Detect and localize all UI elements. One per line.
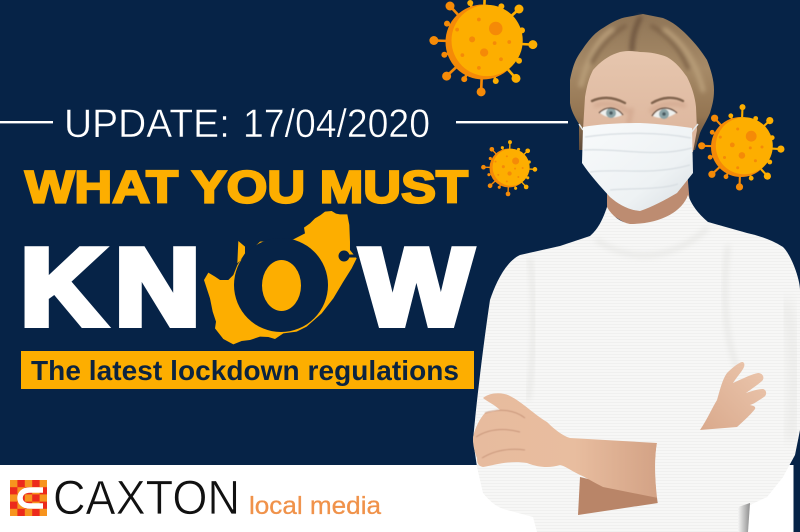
sweater knit texture <box>473 195 800 532</box>
hair strands <box>581 18 703 90</box>
right rule <box>456 121 568 123</box>
front forearm and hand <box>473 393 658 498</box>
body lower edge shadow <box>738 503 750 532</box>
photo: woman in mask <box>473 14 800 532</box>
back hand fingers <box>700 362 766 430</box>
update heading <box>0 102 568 146</box>
letter K: K <box>20 226 104 348</box>
neck <box>607 170 690 226</box>
face mask <box>582 123 693 211</box>
logo: Caxton <box>10 472 381 525</box>
face shading <box>594 104 686 124</box>
icon: large virus <box>429 0 537 96</box>
icon: right virus <box>698 104 784 190</box>
sweater shading <box>528 228 794 440</box>
lower forearm <box>578 477 658 515</box>
face <box>583 51 697 152</box>
letter O <box>234 238 328 332</box>
South Africa map <box>204 211 357 344</box>
icon: small virus <box>481 140 537 196</box>
logo wordmark: CAXTON <box>53 472 240 525</box>
letter O: O <box>267 265 295 306</box>
sweater cuff <box>655 427 787 505</box>
cuff knit texture <box>655 427 787 505</box>
footer panel <box>0 465 794 532</box>
letter W: W <box>361 226 472 348</box>
eyebrows <box>592 98 683 103</box>
hair back <box>570 14 714 150</box>
mask pleats <box>584 133 692 190</box>
eyes <box>599 108 677 119</box>
logo tagline: local media <box>249 492 381 520</box>
update date: 17/04/2020 <box>243 102 430 146</box>
left rule <box>0 121 53 123</box>
subtitle banner: The latest lockdown regulations <box>31 355 459 386</box>
sweater <box>473 195 800 532</box>
finger lines <box>476 410 525 458</box>
letter N: N <box>115 226 200 348</box>
headline: know <box>20 211 472 348</box>
headline: what you must: WHAT YOU MUST <box>25 162 468 212</box>
logo mark <box>10 480 47 516</box>
update label: UPDATE: <box>64 102 230 146</box>
map notch <box>338 250 360 262</box>
ear loops <box>579 124 698 134</box>
